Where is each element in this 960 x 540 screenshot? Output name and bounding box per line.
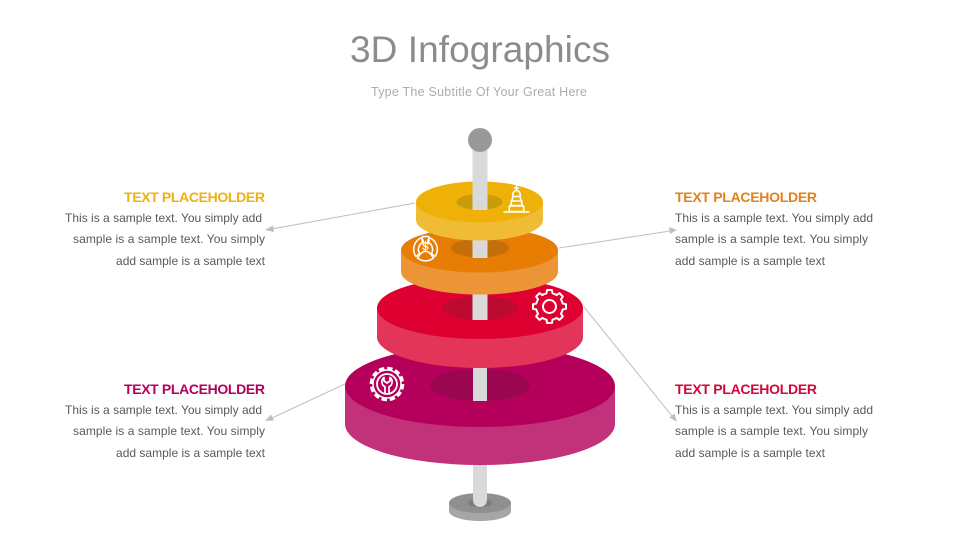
subtitle: Type The Subtitle Of Your Great Here bbox=[371, 85, 587, 99]
icon: money circle bbox=[414, 236, 437, 261]
text block: bottom left: sample is a sample text. You simply bbox=[73, 424, 265, 438]
title: 3D Infographics bbox=[350, 29, 610, 70]
text block: bottom right: This is a sample text. You simply add bbox=[675, 403, 873, 417]
heading: top left: TEXT PLACEHOLDER bbox=[124, 189, 265, 205]
base stand bbox=[449, 493, 511, 521]
connector arrow: bottom left bbox=[265, 384, 345, 421]
text block: bottom right: sample is a sample text. You simply bbox=[675, 424, 868, 438]
disc 1: yellow bbox=[416, 150, 543, 240]
heading: bottom left: TEXT PLACEHOLDER bbox=[124, 381, 265, 397]
text block: bottom left bbox=[65, 381, 266, 460]
icon: chess king bbox=[504, 186, 529, 212]
disc 4: magenta bbox=[345, 345, 615, 465]
text block: top left: sample is a sample text. You simply bbox=[73, 232, 265, 246]
text block: top right bbox=[675, 189, 873, 268]
text block: bottom left: add sample is a sample text bbox=[116, 446, 266, 460]
heading: top right: TEXT PLACEHOLDER bbox=[675, 189, 817, 205]
text block: top right: This is a sample text. You simply add bbox=[675, 211, 873, 225]
text block: bottom left: This is a sample text. You simply add bbox=[65, 403, 262, 417]
text block: top left: This is a sample text. You simply add bbox=[65, 211, 262, 225]
pole: lower segment bbox=[473, 455, 487, 507]
text block: top right: sample is a sample text. You simply bbox=[675, 232, 868, 246]
connector arrow: bottom right bbox=[584, 307, 677, 422]
pole top ball bbox=[468, 128, 492, 152]
text block: top left: add sample is a sample text bbox=[116, 254, 266, 268]
connector arrow: top right bbox=[559, 227, 677, 248]
disc 3: red bbox=[377, 277, 583, 368]
icon: wrench gear bbox=[371, 368, 403, 400]
text block: top right: add sample is a sample text bbox=[675, 254, 826, 268]
connector arrow: top left bbox=[265, 203, 415, 232]
text block: bottom right: add sample is a sample text bbox=[675, 446, 826, 460]
text block: bottom right bbox=[675, 381, 873, 460]
text block: top left bbox=[65, 189, 266, 268]
disc 2: orange bbox=[401, 225, 558, 294]
heading: bottom right: TEXT PLACEHOLDER bbox=[675, 381, 817, 397]
icon: gear bbox=[533, 290, 566, 323]
